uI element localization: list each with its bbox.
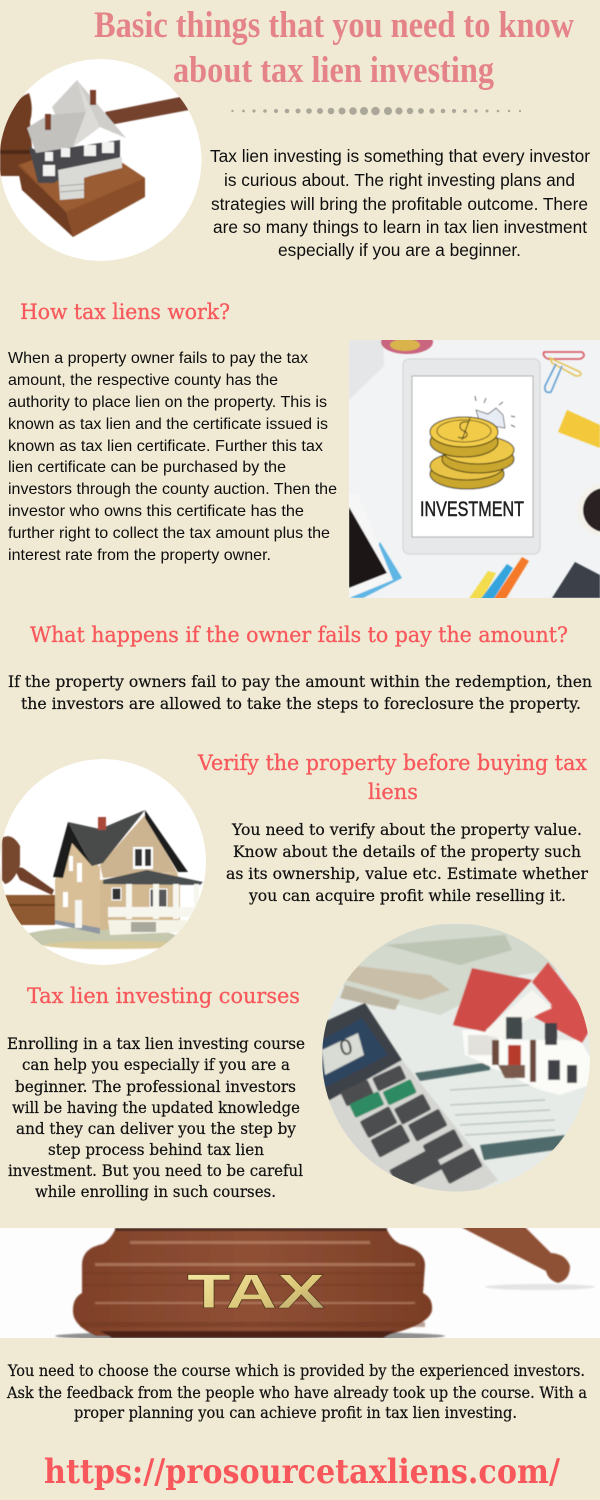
text: investing courses: will be having the updated knowledge bbox=[12, 1099, 300, 1117]
text: owner fails to pay: If the property owners fail to pay the amount within the redemption, then bbox=[8, 673, 592, 691]
text: how tax liens work bbox=[8, 350, 337, 564]
text: investing courses: and they can deliver you the step by bbox=[16, 1120, 296, 1138]
text: verify the property: you can acquire profit while reselling it. bbox=[248, 887, 566, 905]
text: owner fails to pay bbox=[8, 673, 592, 713]
image: calculator and red-roof house bbox=[322, 924, 592, 1195]
text: how tax liens work: amount, the respective county has the bbox=[8, 372, 278, 389]
image: calculator and red-roof house: 0 bbox=[337, 1034, 355, 1061]
text: investing courses: step process behind tax lien bbox=[48, 1141, 264, 1159]
text: verify the property: You need to verify about the property value. bbox=[231, 821, 582, 839]
intro text: especially if you are a beginner. bbox=[278, 240, 521, 260]
text: how tax liens work: lien certificate can be purchased by the bbox=[8, 459, 286, 476]
text: how tax liens work: further right to collect the tax amount plus the bbox=[8, 525, 330, 542]
text: how tax liens work: authority to place lien on the property. This is bbox=[8, 394, 327, 411]
text: closing advice bbox=[6, 1362, 587, 1422]
text: owner fails to pay: the investors are allowed to take the steps to foreclosure the property. bbox=[21, 695, 581, 713]
text: investing courses: beginner. The professional investors bbox=[15, 1078, 296, 1096]
text: investing courses: can help you especially if you are a bbox=[22, 1056, 290, 1074]
intro text bbox=[210, 146, 590, 260]
heading: verify the property: Verify the property before buying tax bbox=[197, 751, 587, 775]
image: TAX gavel banner: TAX bbox=[187, 1266, 325, 1319]
text: how tax liens work: known as tax lien certificate. Further this tax bbox=[8, 438, 323, 455]
heading: verify the property bbox=[197, 751, 587, 804]
text: investing courses: Enrolling in a tax lien investing course bbox=[7, 1035, 305, 1053]
heading: how tax liens work: How tax liens work? bbox=[20, 300, 230, 324]
image: investment tablet on desk bbox=[349, 330, 600, 600]
heading: investing courses: Tax lien investing courses bbox=[27, 984, 300, 1008]
heading: verify the property: liens bbox=[368, 780, 418, 804]
title bbox=[94, 5, 574, 91]
dotted divider bbox=[231, 107, 521, 115]
text: verify the property: as its ownership, value etc. Estimate whether bbox=[226, 865, 589, 883]
heading: owner fails to pay: What happens if the owner fails to pay the amount? bbox=[30, 623, 568, 647]
image: investment tablet on desk: INVESTMENT bbox=[420, 498, 524, 521]
text: closing advice: proper planning you can achieve profit in tax lien investing. bbox=[74, 1404, 517, 1422]
text: how tax liens work: interest rate from the property owner. bbox=[8, 547, 271, 564]
image: tan house with gavel bbox=[0, 759, 206, 965]
text: verify the property: Know about the details of the property such bbox=[233, 843, 581, 861]
text: how tax liens work: When a property owner fails to pay the tax bbox=[8, 350, 308, 367]
text: how tax liens work: investors through the county auction. Then the bbox=[8, 481, 337, 498]
title: about tax lien investing bbox=[173, 50, 494, 91]
intro text: is curious about. The right investing plans and bbox=[224, 170, 575, 190]
text: investing courses: while enrolling in such courses. bbox=[35, 1183, 276, 1201]
image: house on gavel block bbox=[0, 59, 202, 261]
intro text: strategies will bring the profitable outcome. There bbox=[211, 194, 588, 214]
text: how tax liens work: known as tax lien and the certificate issued is bbox=[8, 416, 328, 433]
text: verify the property bbox=[226, 821, 589, 905]
intro text: are so many things to learn in tax lien investment bbox=[213, 217, 587, 237]
intro text: Tax lien investing is something that every investor bbox=[210, 146, 590, 166]
image: TAX gavel banner bbox=[0, 1226, 600, 1341]
text: investing courses bbox=[7, 1035, 305, 1201]
text: investing courses: investment. But you need to be careful bbox=[8, 1162, 303, 1180]
text: how tax liens work: investor who owns this certificate has the bbox=[8, 503, 304, 520]
